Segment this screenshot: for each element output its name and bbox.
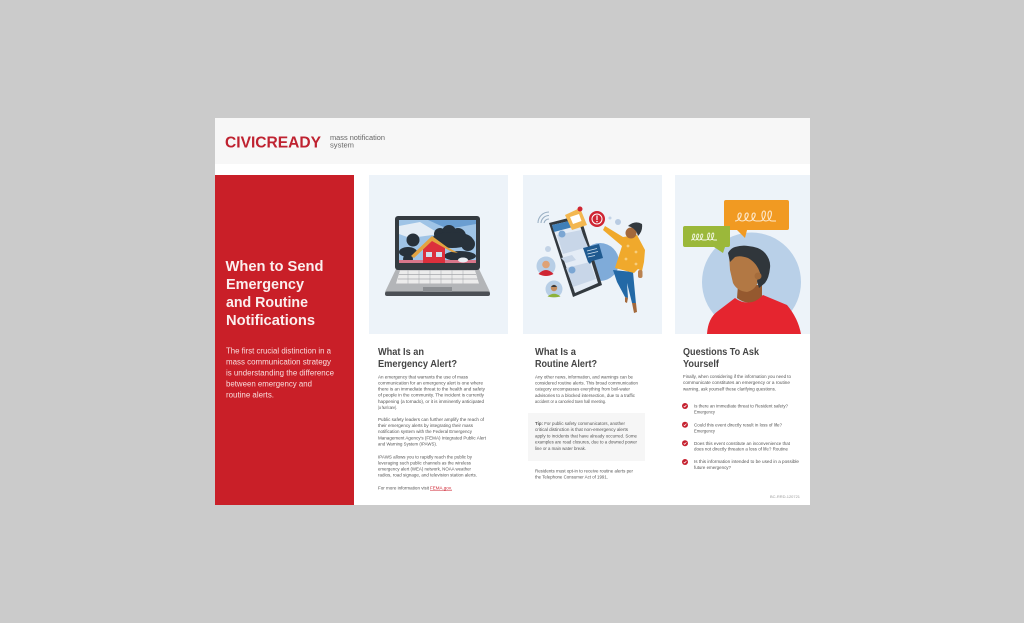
paragraph: Any other news, information, and warnings can be [535,374,633,380]
panel intro text: between emergency and [226,380,312,388]
paragraph 1: (a hurricane). [378,405,397,410]
paragraph 2: notification system with the Federal Emergency [378,429,473,434]
intro paragraph: communicate constitutes an emergency or a routine [683,380,790,385]
paragraph 1: there is an immediate threat to the health and safety [378,386,486,392]
panel intro text: mass communication strategy [226,358,331,366]
phone [549,215,602,297]
red side panel [215,175,354,505]
laptop screen [395,216,480,270]
paragraph 2 [378,417,487,447]
paragraph 3: IPAWS allows you to rapidly reach the public by [378,454,473,460]
paragraph 1: communication for an emergency alert is one where [378,380,483,386]
closing paragraph: Residents must opt-in to receive routine alerts per [535,468,633,474]
panel intro text: is understanding the difference [226,368,335,378]
head circle [702,232,801,314]
logo tagline: system [330,142,354,150]
paragraph: category encompasses everything from boil-water [535,386,630,392]
blue circle [581,243,619,281]
closing paragraph [535,468,633,480]
panel title: Emergency [226,276,305,293]
intro paragraph: warning, ask yourself these clarifying questions. [683,386,776,391]
paragraph: considered routine alerts. This broad communication [535,380,638,386]
paragraph 2: their emergency alerts by integrating their mass [378,423,474,428]
smoke clouds [399,225,476,260]
intro paragraph [683,374,791,391]
intro paragraph: Finally, when considering if the information you need to [683,374,791,379]
question 3: does not directly threaten a loss of life? Routine [694,447,788,452]
illustration panel: person with speech bubbles [675,175,810,334]
heading: Emergency Alert? [378,359,457,370]
house [423,241,445,263]
heading [535,347,597,370]
small dots [545,246,551,252]
heading: Questions To Ask [683,347,759,358]
chat icon [583,244,603,264]
hair [728,246,770,288]
column: questions to ask yourself [682,347,800,499]
person [603,222,645,313]
paragraph 2: Public safety leaders can further amplify the reach of [378,417,485,422]
paragraph [535,374,638,404]
paragraph 1: of people in the community. The incident is currently [378,392,485,398]
panel title [226,258,324,329]
logo tagline [330,135,385,150]
question 4 [682,459,799,470]
tip box: line or a main water break. [535,446,586,451]
question 3: Does this event constitute an inconvenience that [694,441,791,446]
tip box: examples are road closures, due to a downed power [535,440,637,445]
tip box: critical distinction is that non-emergency alerts [535,427,629,432]
paragraph 3: emergency alert (WEA) network, NOAA weather [378,467,471,472]
tip box [528,413,645,461]
shirt [707,295,801,334]
paragraph 1: An emergency that warrants the use of mass [378,374,469,380]
paragraph: advisories to a blocked intersection, due to a traffic [535,393,636,398]
panel intro text: The first crucial distinction in a [226,346,332,356]
logo: CIVICREADY [225,134,321,152]
tip box: apply to incidents that have already occurred. Some [535,433,637,438]
panel intro text: routine alerts. [226,390,274,400]
more information link [378,486,452,491]
neck and face [737,285,762,303]
wifi icon [538,212,549,223]
question 2: Emergency [694,428,716,433]
question 4: Is this information intended to be used in a possible [694,459,799,464]
document page [215,118,810,505]
laptop base [385,269,490,292]
question 4: future emergency? [694,465,731,470]
keyboard [396,270,479,284]
more information link: FEMA.gov. [430,486,452,490]
heading: What Is a [535,347,576,358]
panel title: Notifications [226,312,315,329]
question 3 [682,440,791,452]
tip box: Tip: For public safety communicators, another [535,421,625,426]
panel title: When to Send [226,258,324,275]
mail icon [565,206,587,230]
question 1: Emergency [694,410,716,415]
more information link: For more information visit [378,486,430,490]
question 1 [682,403,788,415]
question 2 [682,422,782,433]
header band [215,118,810,164]
paragraph 2: and Warning System (IPAWS). [378,442,437,447]
heading: Yourself [683,359,720,370]
heading [683,347,759,370]
closing paragraph: the Telephone Consumer Act of 1991. [535,475,608,480]
orange speech bubble [724,200,789,238]
panel title: and Routine [226,294,308,311]
heading: Routine Alert? [535,359,597,370]
column: what is a routine alert [528,347,645,480]
paragraph 1 [378,374,486,410]
man avatar [546,280,562,298]
alert icon [589,211,605,227]
logo tagline: mass notification [330,135,385,142]
paragraph: accident or a canceled town hall meeting. [535,399,606,404]
woman avatar [536,256,556,276]
column: what is an emergency alert [378,347,487,491]
heading: What Is an [378,347,424,358]
document code: BC-RRD-120721 [770,495,800,499]
question 1: Is there an immediate threat to Resident safety? [694,404,788,409]
paragraph 3: radios, road signage, and television station alerts. [378,473,477,478]
green speech bubble [683,226,730,253]
paragraph 3 [378,454,477,478]
paragraph 2: Management Agency's (FEMA) Integrated Public Alert [378,436,487,441]
paragraph 3: leveraging such public channels as the wireless [378,460,472,466]
question 2: Could this event directly result in loss of life? [694,422,782,427]
illustration panel: laptop with house on fire [369,175,508,334]
panel intro text [226,346,335,400]
illustration panel: phone and person [523,175,662,334]
paragraph 1: happening (a tornado), or it is imminently anticipated [378,399,484,404]
heading [378,347,457,370]
